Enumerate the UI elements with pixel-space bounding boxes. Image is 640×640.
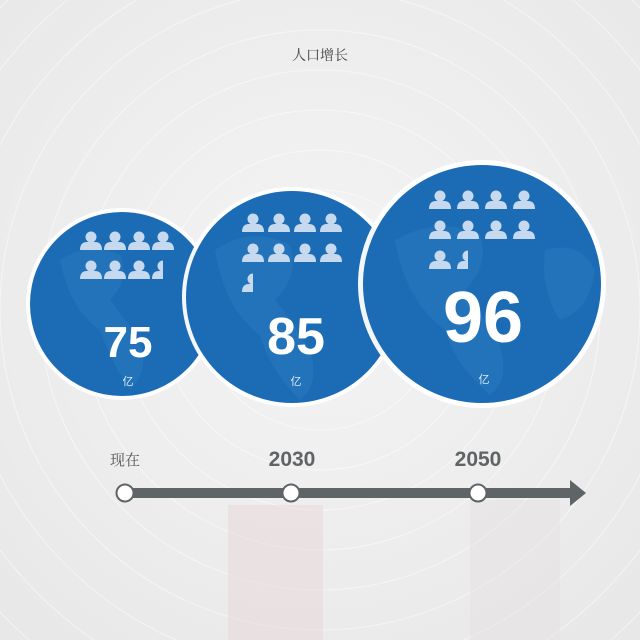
label: now: 现在 [110, 452, 140, 469]
dot: now [116, 484, 134, 502]
globe: 75: 亿 [122, 373, 134, 389]
globe: 85 [182, 187, 384, 407]
arrow [125, 480, 586, 506]
globe: 96: 亿 [478, 371, 490, 387]
globe: 85: 85 [267, 308, 325, 366]
globe: 96 [358, 160, 606, 408]
label: 2050: 2050 [455, 448, 501, 471]
dot: 2030 [282, 484, 300, 502]
globe: 96: 96 [443, 278, 523, 358]
globe: 75: 75 [104, 318, 152, 367]
globe: 85: 亿 [290, 373, 302, 389]
globe: 75 [26, 208, 201, 400]
dot: 2050 [470, 484, 486, 502]
title: 人口增长 [292, 49, 348, 64]
label: 2030: 2030 [269, 448, 315, 471]
